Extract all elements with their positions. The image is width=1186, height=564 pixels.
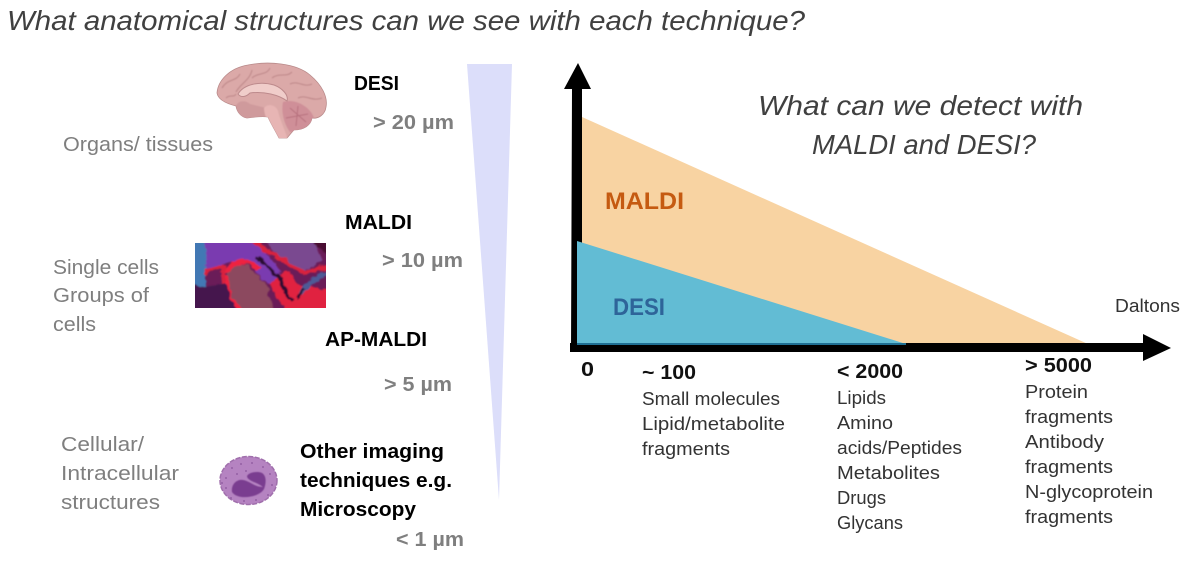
- group: about 100 Da: fragments: [642, 439, 730, 459]
- group: under 2000 Da: [837, 361, 962, 533]
- group: about 100 Da: ~ 100: [642, 362, 696, 384]
- group: over 5000 Da: fragments: [1025, 507, 1113, 527]
- group: under 2000 Da: Glycans: [837, 513, 903, 533]
- label: organs and tissues: Organs/ tissues: [63, 134, 213, 156]
- label: MALDI: MALDI: [345, 212, 412, 234]
- label: other imaging techniques: [300, 441, 452, 521]
- group: under 2000 Da: Metabolites: [837, 463, 940, 483]
- group: over 5000 Da: fragments: [1025, 457, 1113, 477]
- arrow: vertical axis: [564, 63, 591, 352]
- label: single cells and groups of cells: [53, 257, 159, 336]
- nucleus: [232, 472, 266, 497]
- group: about 100 Da: Small molecules: [642, 389, 780, 409]
- group: over 5000 Da: fragments: [1025, 407, 1113, 427]
- label: microscopy resolution: < 1 µm: [396, 529, 464, 551]
- label: other imaging techniques: Other imaging: [300, 441, 444, 463]
- title: anatomical structures question: What anatomical structures can we see with each technique?: [7, 5, 805, 36]
- group: under 2000 Da: Drugs: [837, 488, 886, 508]
- label: DESI resolution: > 20 µm: [373, 112, 454, 134]
- group: over 5000 Da: > 5000: [1025, 355, 1092, 377]
- label: other imaging techniques: Microscopy: [300, 499, 417, 521]
- line: DESI base: [577, 343, 906, 345]
- area: DESI range: [577, 241, 906, 344]
- group: over 5000 Da: Protein: [1025, 382, 1088, 402]
- label: MALDI area: MALDI: [605, 188, 684, 215]
- label: single cells and groups of cells: Single cells: [53, 257, 159, 279]
- label: DESI area: DESI: [613, 294, 665, 321]
- group: about 100 Da: Lipid/metabolite: [642, 414, 785, 434]
- group: under 2000 Da: Lipids: [837, 388, 886, 408]
- axis label: Daltons: Daltons: [1115, 296, 1180, 316]
- group: over 5000 Da: [1025, 355, 1153, 527]
- label: AP-MALDI resolution: > 5 µm: [384, 374, 452, 396]
- group: over 5000 Da: Antibody: [1025, 432, 1104, 452]
- chart: detectable mass ranges: [564, 63, 1171, 361]
- group: under 2000 Da: < 2000: [837, 361, 903, 383]
- label: single cells and groups of cells: cells: [53, 314, 96, 336]
- area: MALDI range: [582, 117, 1088, 344]
- label: DESI: DESI: [354, 73, 399, 95]
- arrow: horizontal axis: [570, 334, 1171, 361]
- label: cellular and intracellular structures: structures: [61, 492, 160, 514]
- group: about 100 Da: [642, 362, 785, 459]
- label: cellular and intracellular structures: Intracellular: [61, 463, 179, 485]
- heading: what can we detect: MALDI and DESI?: [812, 129, 1036, 160]
- label: single cells and groups of cells: Groups of: [53, 285, 149, 307]
- heading: what can we detect: [758, 90, 1083, 160]
- tick label: 0: 0: [581, 359, 594, 381]
- label: AP-MALDI: AP-MALDI: [325, 329, 427, 351]
- group: under 2000 Da: acids/Peptides: [837, 438, 962, 458]
- label: other imaging techniques: techniques e.g.: [300, 470, 452, 492]
- label: MALDI resolution: > 10 µm: [382, 250, 463, 272]
- heading: what can we detect: What can we detect with: [758, 90, 1083, 121]
- group: under 2000 Da: Amino: [837, 413, 893, 433]
- label: cellular and intracellular structures: Cellular/: [61, 434, 145, 456]
- icon: brain: [217, 63, 326, 140]
- resolution scale wedge: [467, 64, 512, 500]
- icon: white blood cell: [220, 456, 277, 504]
- group: over 5000 Da: N-glycoprotein: [1025, 482, 1153, 502]
- image: MALDI tissue section: [195, 243, 326, 308]
- label: cellular and intracellular structures: [61, 434, 179, 514]
